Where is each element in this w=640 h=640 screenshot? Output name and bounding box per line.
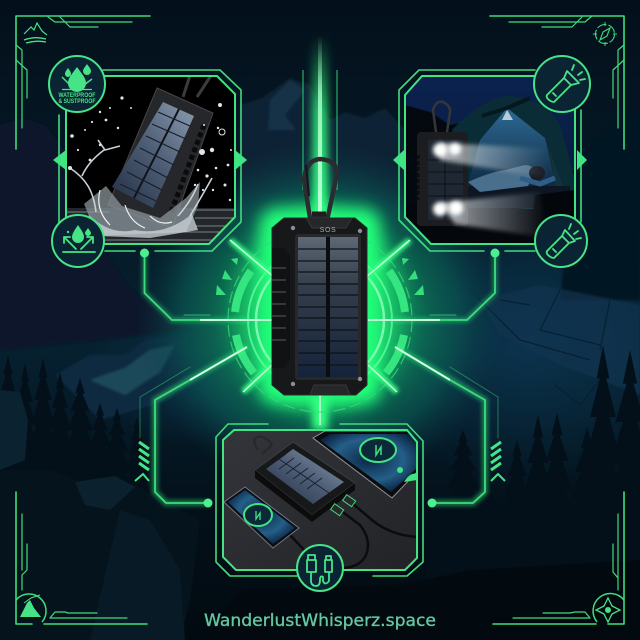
light beams — [433, 143, 548, 238]
tablet — [313, 431, 417, 498]
connector: charging panel, left — [140, 347, 247, 508]
water droplets — [68, 96, 232, 201]
splash crown — [70, 140, 212, 238]
icon: compass — [593, 22, 617, 46]
connector: flashlight panel to centre — [368, 248, 500, 320]
badge: waterproof and dustproof: WATERPROOF — [58, 93, 96, 99]
sleeping person — [468, 165, 555, 192]
water surface — [66, 208, 236, 244]
site name: WanderlustWhisperz.space — [204, 611, 436, 631]
body — [272, 218, 367, 395]
solar panel — [298, 237, 358, 377]
badge: water drop with arrows — [52, 215, 104, 267]
carabiner — [304, 159, 337, 218]
concentric tech arcs — [216, 228, 424, 412]
tent — [452, 96, 574, 210]
corner frame: bottom left — [16, 492, 147, 624]
screws — [291, 226, 362, 386]
icon: mountain badge — [16, 594, 46, 622]
panel: flashlight tent photo — [393, 56, 590, 267]
badge: flashlight small — [535, 215, 587, 267]
arrow markers — [393, 150, 587, 170]
SOS label: SOS — [320, 227, 336, 234]
device tilted in splash — [108, 77, 214, 227]
central glow — [135, 36, 505, 493]
central power bank — [272, 159, 367, 395]
connector rays — [230, 240, 410, 392]
connector: charging panel, right — [395, 347, 498, 508]
icon: mountains — [24, 23, 47, 43]
power bank flat — [254, 437, 356, 522]
panel: waterproof photo — [49, 56, 247, 267]
chevrons left — [135, 442, 149, 481]
connector: waterproof panel to centre — [140, 248, 272, 320]
badge: waterproof and dustproof — [49, 56, 105, 112]
panel: charging photo — [216, 424, 423, 591]
corner frame: top right — [490, 16, 624, 149]
icon: compass star badge — [593, 594, 624, 622]
phone — [224, 487, 299, 548]
cables — [290, 503, 417, 568]
badge: waterproof and dustproof: & SUSTPROOF — [58, 99, 96, 105]
arrow markers — [53, 150, 247, 170]
badge: flashlight — [534, 56, 590, 112]
badge: usb cable — [297, 545, 343, 591]
power bank with lights — [417, 102, 468, 226]
corner frame: top left — [16, 16, 150, 149]
chevrons right — [491, 442, 505, 481]
corner frame: bottom right — [493, 492, 624, 624]
mountains and ground — [405, 105, 575, 245]
